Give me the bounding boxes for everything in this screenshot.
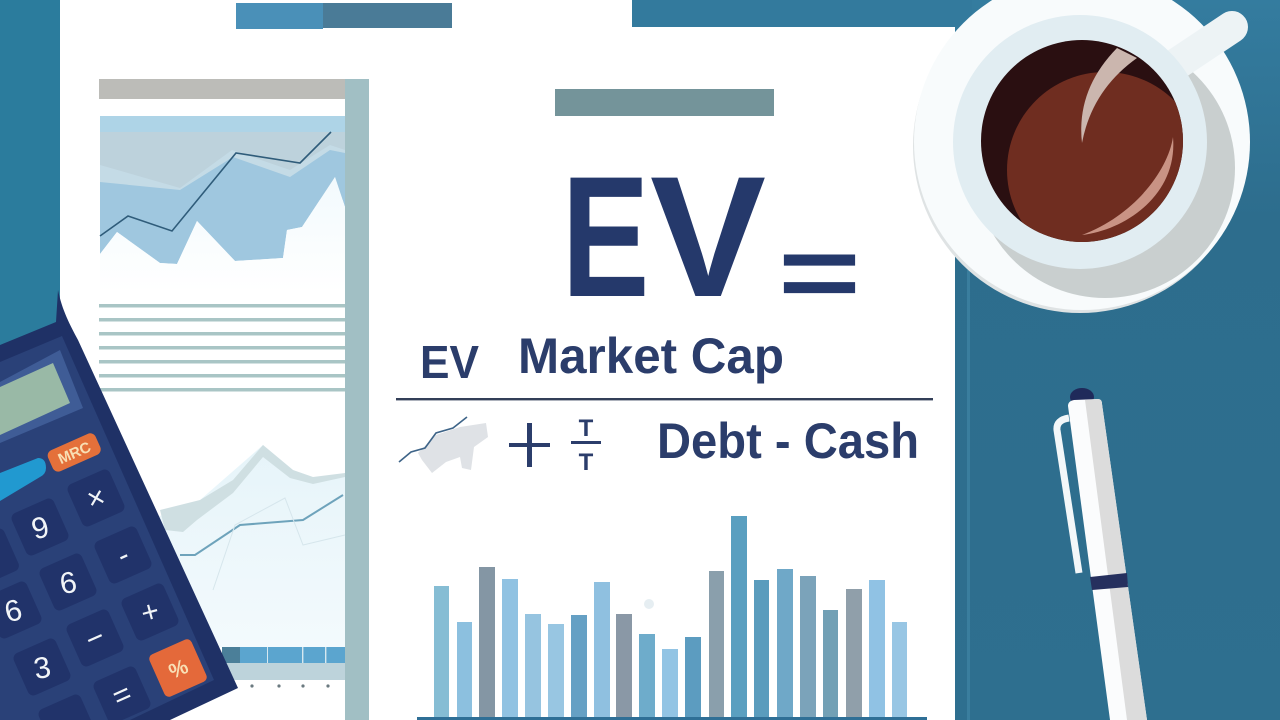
icon: coffee cup [913,0,1250,313]
small fraction glyph [571,415,601,476]
key labels [6,490,158,702]
orange key: percent: % [165,655,192,684]
pen tip [1070,388,1094,406]
calculator screen [0,350,83,443]
panel: left report column [99,79,369,720]
heading: EV: E [562,141,649,333]
title formula [562,141,861,333]
pen band [1090,573,1128,590]
section label bar [555,89,774,116]
paper sheet [60,0,955,720]
icon: mini chart [399,417,488,473]
formula numerator [420,328,784,388]
key labels: 6 [57,566,79,601]
label: Market Cap: Market Cap [518,328,784,384]
orange key: top [48,433,101,472]
key labels: 9 [28,510,53,547]
orange key: top: MRC [56,439,94,468]
saucer [913,0,1247,313]
cup shadow [975,38,1235,298]
label: Debt - Cash: Debt - Cash [657,413,919,469]
key labels: 3 [31,651,53,686]
key labels: - [112,538,134,573]
small fraction glyph: T [579,415,594,442]
area chart: upper [100,116,345,292]
icon: calculator [0,290,238,720]
report heading bar [99,79,345,99]
pen body [1068,399,1147,720]
equals sign: = [778,216,861,330]
label: EV: EV [420,336,479,388]
heading: EV: V [650,141,766,333]
area chart: lower [150,445,345,688]
bar chart [417,516,927,720]
coffee [981,40,1183,242]
key labels: 6 [1,593,26,630]
icon: pen [1057,388,1147,720]
cup handle [1175,27,1232,65]
plus sign [509,423,550,467]
small fraction glyph: T [579,449,594,476]
key labels: × [83,480,109,517]
key labels: = [107,677,137,714]
text lines [99,304,345,392]
key labels: + [137,594,163,631]
fraction line [396,398,933,400]
blue key [0,458,46,501]
key labels: − [80,620,110,657]
formula denominator [399,413,919,476]
pen clip [1057,418,1079,573]
orange key: percent [148,638,208,698]
cup rim [953,15,1207,269]
report side strip [345,79,369,720]
keypad [0,468,180,720]
top header bar [236,3,452,29]
